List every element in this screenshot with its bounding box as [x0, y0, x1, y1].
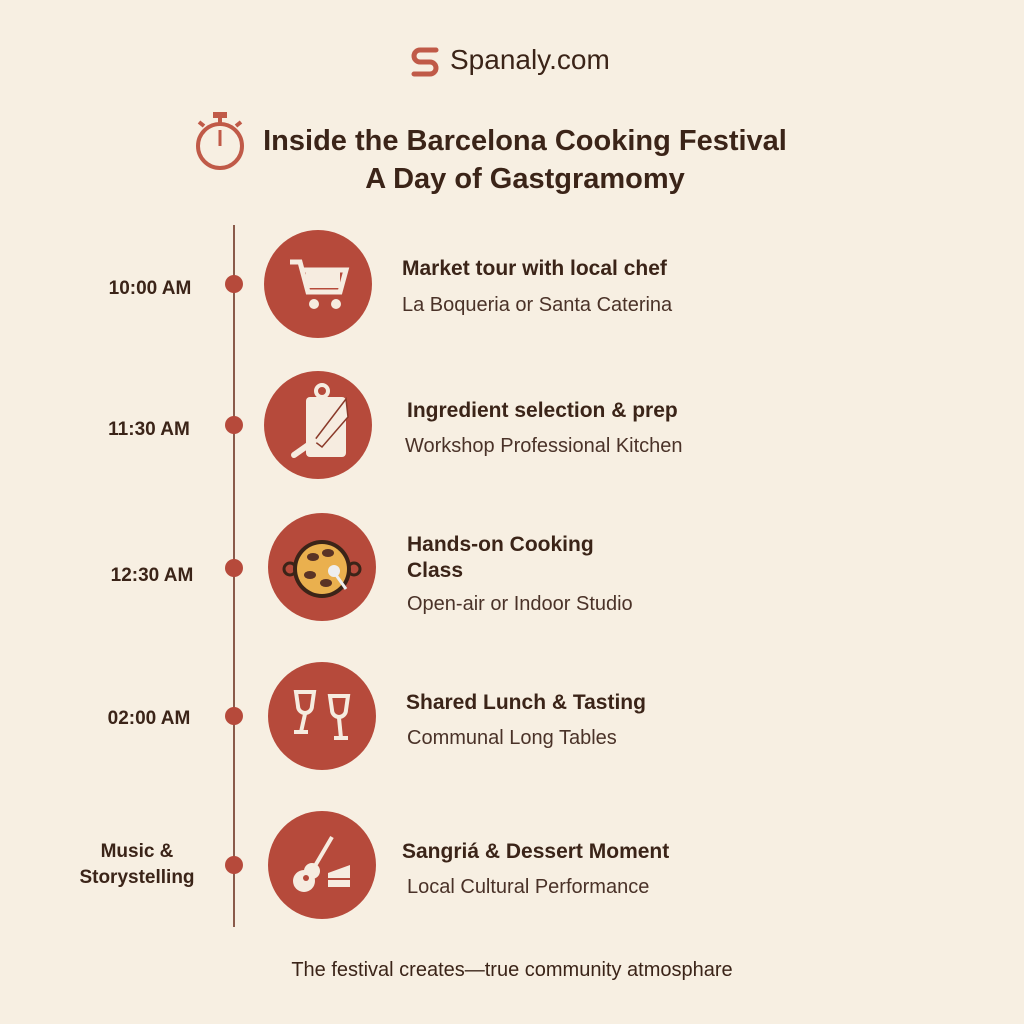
footer text: The festival creates—true community atmosphare: [291, 959, 733, 981]
item 4: Communal Long Tables: [407, 727, 617, 749]
item 3: Open-air or Indoor Studio: [407, 593, 633, 615]
icon: wine glasses: [268, 662, 376, 770]
title: A Day of Gastgramomy: [365, 163, 685, 195]
item 3: Hands-on Cooking: [407, 533, 594, 556]
item 4: Shared Lunch & Tasting: [406, 691, 646, 714]
item 3: [111, 513, 633, 621]
item 5: Sangriá & Dessert Moment: [402, 840, 669, 863]
item 5: [79, 811, 669, 919]
item 2: Workshop Professional Kitchen: [405, 435, 683, 457]
item 5: Storystelling: [79, 867, 195, 888]
item 1: [109, 230, 672, 338]
item 1: 10:00 AM: [109, 278, 191, 299]
item 5: Music &: [101, 841, 173, 862]
title: Inside the Barcelona Cooking Festival: [263, 125, 787, 157]
item 4: [108, 662, 646, 770]
item 2: [108, 371, 683, 479]
icon: knife and board: [264, 371, 372, 479]
item 2: 11:30 AM: [108, 419, 190, 440]
item 1: Market tour with local chef: [402, 257, 667, 280]
item 5: Local Cultural Performance: [407, 876, 649, 898]
item 2: Ingredient selection & prep: [407, 399, 678, 422]
item 1: La Boqueria or Santa Caterina: [402, 294, 672, 316]
title: [263, 125, 787, 195]
icon: guitar and cake: [268, 811, 376, 919]
logo: Spanaly.com: [450, 44, 610, 75]
icon: cart: [264, 230, 372, 338]
icon: stopwatch: [196, 112, 244, 170]
icon: paella: [268, 513, 376, 621]
timeline line: [233, 225, 235, 927]
item 3: 12:30 AM: [111, 565, 193, 586]
item 4: 02:00 AM: [108, 708, 190, 729]
item 3: Class: [407, 559, 463, 582]
